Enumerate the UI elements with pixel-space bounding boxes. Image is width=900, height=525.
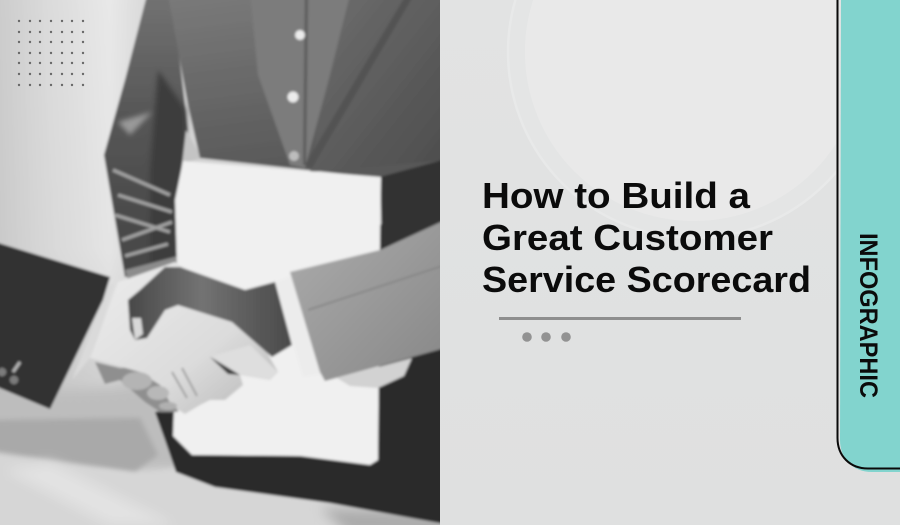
hand holding folder [337,358,412,388]
woman's trousers and waist [154,224,440,524]
left cuff [76,354,88,374]
white folder [173,161,381,465]
sleeve seam [308,265,445,310]
title: Service Scorecard [482,259,811,300]
white shirt cuff on right [276,274,321,377]
title: Great Customer [482,217,773,258]
woman's left sleeve [104,0,188,280]
gap between sleeve and body [180,130,200,164]
light suit sleeve on right [290,220,445,381]
clasped light hand [90,262,278,414]
dark hand [128,267,292,357]
photo: handshake in black and white [0,0,450,525]
title [482,175,811,300]
decorative dot grid [18,20,84,86]
tab: infographic [838,0,900,472]
blurred box on table [56,387,174,472]
woman's blazer and shirt [171,0,440,225]
dark suit sleeve on left [0,242,110,409]
table [0,452,174,525]
sleeve buttons [0,362,20,385]
three dots [522,332,571,342]
shirt buttons [288,30,305,161]
divider rule [499,317,741,320]
title: How to Build a [482,175,751,216]
tab label: INFOGRAPHIC [854,233,882,398]
panel: title background [525,0,836,221]
